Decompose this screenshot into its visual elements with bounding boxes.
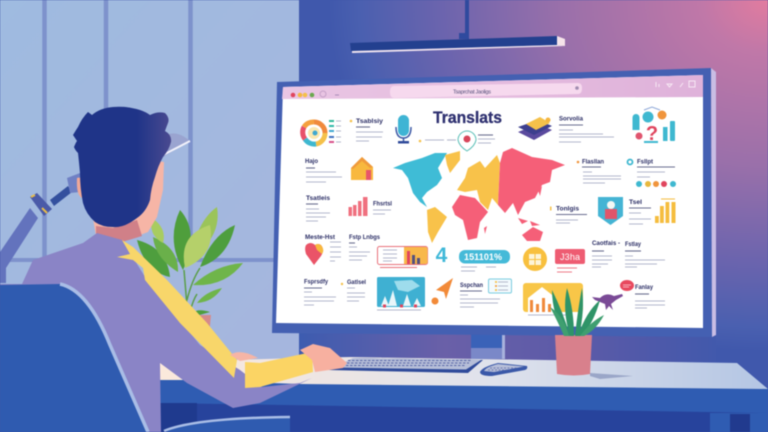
world map bbox=[393, 148, 565, 243]
text block: top right: Sorvolia bbox=[559, 116, 583, 122]
Australia bbox=[522, 227, 543, 241]
yellow shirt panel bbox=[117, 240, 237, 378]
number four: 4 bbox=[436, 244, 448, 267]
far hand bbox=[230, 352, 258, 361]
North America bbox=[393, 153, 447, 207]
ceiling lamp bbox=[350, 0, 565, 53]
text block: Caotfais bbox=[592, 240, 620, 267]
chair base bbox=[165, 417, 290, 432]
desk plant bbox=[550, 288, 604, 336]
donut chart bbox=[303, 122, 325, 144]
location pin bbox=[419, 131, 495, 151]
chair bbox=[0, 284, 290, 432]
text block: Fstp Lnbgs: Fstp Lnbgs bbox=[349, 234, 380, 241]
desk top bbox=[160, 357, 768, 389]
icon: shield bbox=[598, 197, 623, 225]
text block: Fsprsdfy bbox=[304, 278, 336, 305]
text block: Fanlay: Fanlay bbox=[635, 284, 653, 291]
screen bbox=[276, 75, 703, 328]
monitor bbox=[272, 68, 716, 337]
card: small list bbox=[488, 279, 512, 293]
text block: Tonlgis bbox=[550, 206, 587, 223]
desk underside bbox=[158, 395, 768, 432]
card: red stat: J3ha bbox=[560, 252, 580, 262]
icon: speech bubble bbox=[620, 280, 634, 291]
icon: layered hand bbox=[518, 117, 552, 140]
desk bbox=[158, 357, 768, 432]
text block: Fstlay bbox=[625, 241, 665, 267]
text block: top right bbox=[559, 116, 614, 142]
keyboard bbox=[328, 358, 483, 373]
text block: Tsel bbox=[629, 199, 651, 224]
desk front edge bbox=[160, 380, 768, 413]
card: map illustration bbox=[377, 277, 425, 310]
text block: Fanlay bbox=[635, 284, 665, 308]
text block: Tonlgis: Tonlgis bbox=[556, 206, 579, 212]
hair bbox=[73, 107, 171, 227]
icon: purple animal bbox=[592, 294, 623, 310]
desk leg bbox=[710, 413, 768, 432]
icon: house bbox=[351, 157, 373, 180]
text block: Fsprsdfy: Fsprsdfy bbox=[304, 278, 328, 286]
browser bar bbox=[282, 75, 703, 99]
text block: Flasllan: Flasllan bbox=[582, 158, 604, 166]
text block: Fhsrtsl bbox=[373, 200, 392, 214]
window bbox=[0, 0, 299, 360]
text block: Hajo: Hajo bbox=[305, 158, 318, 165]
desk lamp bbox=[0, 133, 190, 283]
text block: Gatlsel bbox=[341, 279, 366, 301]
near hand bbox=[300, 344, 347, 372]
text block: Tsel: Tsel bbox=[629, 199, 642, 206]
icon cluster: question mark: ? bbox=[646, 123, 658, 145]
text block: Fstlay: Fstlay bbox=[625, 241, 641, 248]
browser bar: Tsaprchat Jaoligs bbox=[453, 90, 491, 96]
yellow sleeve bbox=[245, 352, 313, 388]
card: browser with bars bbox=[378, 246, 428, 268]
numeric keypad bbox=[480, 363, 527, 376]
shirt bbox=[0, 233, 312, 432]
card: yellow chart bbox=[523, 283, 583, 315]
text block: Hajo bbox=[305, 158, 342, 182]
text block and swatches: Fsllpt bbox=[628, 158, 676, 187]
monitor stand bbox=[471, 330, 505, 359]
person bbox=[0, 107, 347, 432]
text block: Tsatleis bbox=[306, 195, 330, 221]
text block: Gatlsel: Gatlsel bbox=[347, 279, 366, 286]
text block: top left bbox=[350, 118, 383, 141]
South America bbox=[427, 207, 447, 243]
plant pot bbox=[193, 315, 211, 336]
text block: Fhsrtsl: Fhsrtsl bbox=[373, 200, 392, 208]
neck and ear bbox=[92, 160, 164, 242]
title: Translats bbox=[433, 108, 502, 127]
stat pill: 151101% bbox=[464, 252, 502, 262]
text block: Caotfais: Caotfais - bbox=[592, 240, 620, 247]
icon cluster: question mark bbox=[632, 107, 675, 145]
text block: Flasllan bbox=[577, 158, 621, 183]
Greenland bbox=[445, 151, 460, 173]
flower pot bbox=[555, 335, 633, 379]
bar chart: red bbox=[348, 197, 368, 216]
monitor frame bbox=[272, 68, 712, 337]
text block: Fstp Lnbgs bbox=[349, 234, 380, 260]
Europe bbox=[457, 155, 500, 210]
text block and heart: Meste-Hst bbox=[305, 234, 336, 241]
Africa bbox=[452, 195, 488, 240]
icon: paper plane bbox=[432, 278, 453, 304]
wall below monitor bbox=[299, 330, 716, 362]
icon: yellow grid circle bbox=[523, 247, 547, 271]
text block and heart bbox=[305, 234, 341, 265]
text block: Tsatleis: Tsatleis bbox=[306, 195, 330, 202]
icon: heart bbox=[305, 243, 323, 265]
text block: Sspchan bbox=[460, 282, 500, 307]
stat pill bbox=[459, 250, 510, 271]
text block: top left: Tsablsiy bbox=[356, 118, 383, 125]
bar chart: yellow bbox=[655, 199, 676, 223]
islands bbox=[484, 186, 542, 234]
text block: Sspchan: Sspchan bbox=[460, 282, 483, 289]
donut legend bbox=[329, 121, 341, 142]
Asia bbox=[498, 148, 565, 215]
text block and swatches: Fsllpt: Fsllpt bbox=[637, 158, 654, 166]
icon: microphone bbox=[396, 115, 411, 144]
background plant bbox=[137, 207, 243, 336]
card: red stat bbox=[555, 249, 585, 272]
